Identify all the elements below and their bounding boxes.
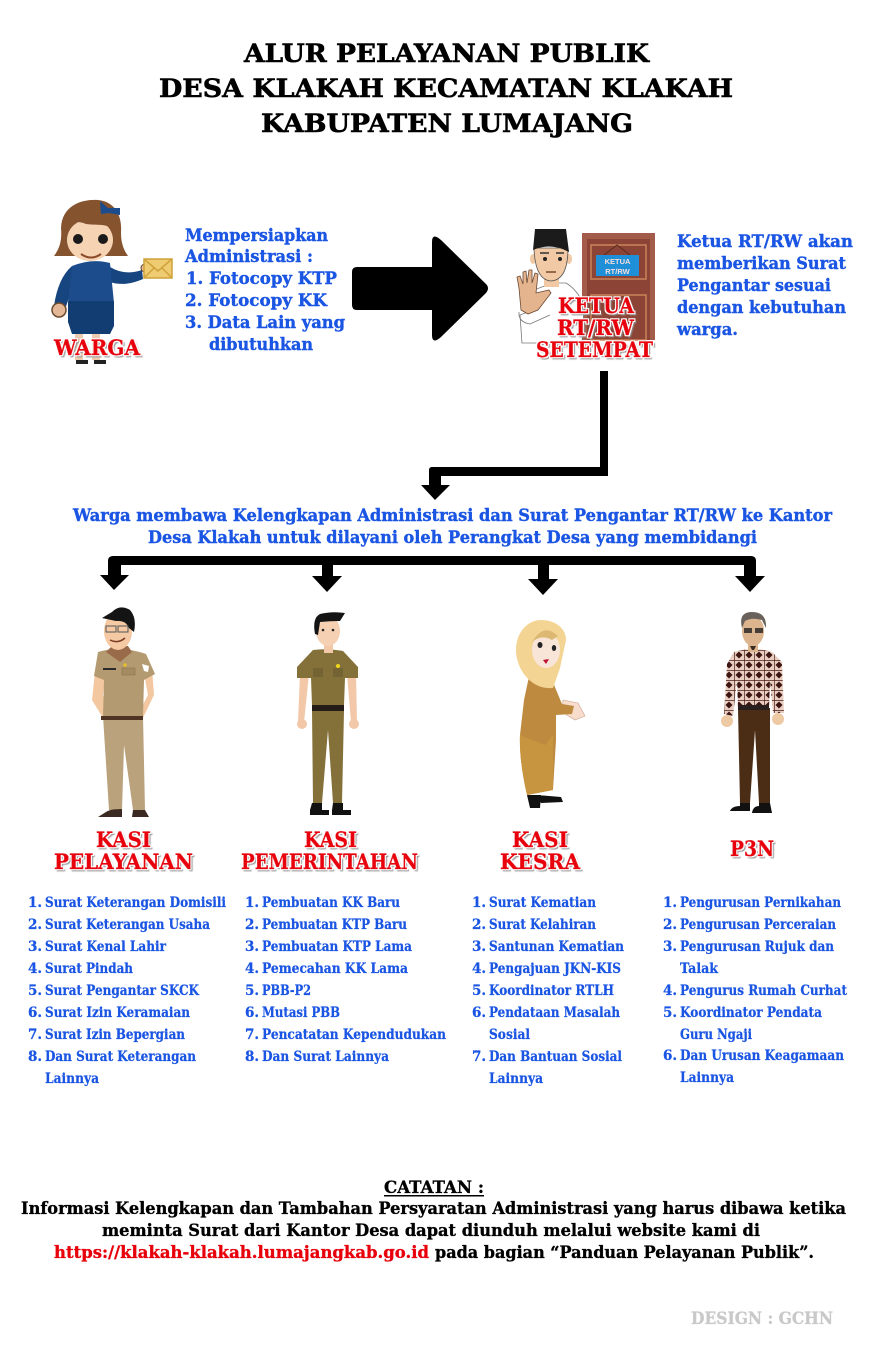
list: layanan kasi pelayanan: Surat Izin Keramaian — [45, 1005, 190, 1021]
list: layanan kasi pemerintahan: 2. — [245, 917, 259, 933]
note: catatan: CATATAN : — [384, 1178, 484, 1198]
text: persiapan administrasi: dibutuhkan — [209, 335, 313, 355]
list: layanan p3n: 5. — [663, 1005, 677, 1021]
list: layanan kasi kesra: Surat Kelahiran — [489, 917, 596, 933]
list: layanan kasi pemerintahan: Pembuatan KK Baru — [262, 895, 400, 911]
text: instruksi warga: Desa Klakah untuk dilayani oleh Perangkat Desa yang membidangi — [148, 528, 758, 548]
text: ketua description — [676, 232, 853, 340]
icon: man in batik shirt — [721, 612, 784, 813]
list: layanan kasi pelayanan: Surat Keterangan Domisili — [45, 895, 226, 911]
panel: p3n — [663, 612, 848, 1086]
list: layanan kasi pemerintahan: 7. — [245, 1027, 259, 1043]
label: ketua rt/rw setempat: RT/RW — [557, 315, 634, 340]
panel: kasi kesra — [472, 620, 624, 1087]
list: layanan kasi kesra — [472, 895, 624, 1087]
note: catatan: https://klakah-klakah.lumajangkab.go.id — [54, 1243, 429, 1263]
label: kasi pemerintahan: KASI — [304, 827, 357, 852]
label: p3n: P3N — [730, 836, 774, 861]
list: layanan kasi pemerintahan: 6. — [245, 1005, 259, 1021]
label: kasi pelayanan: KASI — [96, 827, 151, 852]
list: layanan kasi pemerintahan: Mutasi PBB — [262, 1005, 340, 1021]
label: kasi kesra: KESRA — [500, 849, 581, 874]
list: layanan kasi pemerintahan: 8. — [245, 1049, 259, 1065]
list: layanan kasi pemerintahan: Pencatatan Kependudukan — [262, 1027, 446, 1043]
list: layanan kasi pelayanan — [28, 895, 226, 1087]
arrow: elbow down — [421, 371, 608, 500]
title: KABUPATEN LUMAJANG — [261, 109, 633, 138]
list: layanan kasi pelayanan: 4. — [28, 961, 42, 977]
list: layanan p3n: Guru Ngaji — [680, 1027, 752, 1043]
panel: kasi pemerintahan — [241, 612, 446, 1065]
list: layanan kasi pelayanan: Surat Pindah — [45, 961, 133, 977]
list: layanan p3n: Lainnya — [680, 1070, 734, 1086]
note: catatan: Informasi Kelengkapan dan Tambahan Persyaratan Administrasi yang harus dibawa ketika — [21, 1199, 846, 1219]
list: layanan p3n: 4. — [663, 983, 677, 999]
list: layanan kasi kesra: Pengajuan JKN-KIS — [489, 961, 621, 977]
list: layanan kasi pelayanan: Surat Izin Bepergian — [45, 1027, 185, 1043]
label: kasi kesra — [500, 827, 581, 874]
list: layanan kasi pelayanan: 8. — [28, 1049, 42, 1065]
icon: woman with envelope — [52, 200, 172, 364]
label: kasi kesra: KASI — [512, 827, 568, 852]
list: layanan kasi pemerintahan: 4. — [245, 961, 259, 977]
text: instruksi warga: Warga membawa Kelengkapan Administrasi dan Surat Pengantar RT/RW ke Kantor — [72, 506, 833, 526]
list: layanan kasi pelayanan: Surat Pengantar SKCK — [45, 983, 200, 999]
icon: door with sign — [582, 233, 655, 340]
panel: warga — [52, 200, 345, 364]
label: kasi pemerintahan: PEMERINTAHAN — [241, 849, 418, 874]
panel: ketua rt/rw — [517, 229, 853, 362]
text: ketua description: Pengantar sesuai — [677, 276, 831, 296]
list: layanan kasi pelayanan: Dan Surat Keterangan — [45, 1049, 196, 1065]
icon: man with raised hand — [517, 229, 584, 343]
icon: door with sign: RT/RW — [605, 267, 631, 276]
list: layanan p3n: Pengurus Rumah Curhat — [680, 983, 848, 999]
text: persiapan administrasi: 3. Data Lain yang — [185, 313, 345, 333]
list: layanan p3n: 6. — [663, 1048, 677, 1064]
list: layanan kasi kesra: 3. — [472, 939, 486, 955]
text: persiapan administrasi: Administrasi : — [184, 247, 313, 267]
list: layanan p3n — [663, 895, 848, 1086]
list: layanan kasi kesra: 1. — [472, 895, 486, 911]
list: layanan kasi kesra: 4. — [472, 961, 486, 977]
list: layanan kasi kesra: Pendataan Masalah — [489, 1005, 620, 1021]
list: layanan kasi kesra: 7. — [472, 1049, 486, 1065]
list: layanan kasi pelayanan: 6. — [28, 1005, 42, 1021]
icon: officer in uniform — [297, 612, 359, 815]
list: layanan kasi kesra: Surat Kematian — [489, 895, 596, 911]
list: layanan kasi pemerintahan: 3. — [245, 939, 259, 955]
list: layanan kasi pelayanan: Surat Keterangan Usaha — [45, 917, 210, 933]
list: layanan p3n: Dan Urusan Keagamaan — [680, 1048, 844, 1064]
icon: door with sign: KETUA — [605, 257, 631, 266]
note: catatan: meminta Surat dari Kantor Desa dapat diunduh melalui website kami di — [102, 1221, 761, 1241]
title: ALUR PELAYANAN PUBLIK — [243, 39, 650, 68]
list: layanan kasi kesra: Lainnya — [489, 1071, 543, 1087]
list: layanan p3n: 1. — [663, 895, 677, 911]
text: ketua description: warga. — [676, 320, 738, 340]
list: layanan kasi pelayanan: 3. — [28, 939, 42, 955]
list: layanan p3n: Pengurusan Perceraian — [680, 917, 836, 933]
text: persiapan administrasi: 1. Fotocopy KTP — [186, 269, 337, 289]
arrows: branch to four officers — [100, 556, 765, 595]
text: persiapan administrasi — [184, 226, 345, 355]
label: ketua rt/rw setempat — [536, 293, 653, 362]
list: layanan kasi pemerintahan: 5. — [245, 983, 259, 999]
label: ketua rt/rw setempat: KETUA — [558, 293, 635, 318]
icon: officer with glasses — [92, 607, 155, 817]
text: ketua description: memberikan Surat — [677, 254, 846, 274]
list: layanan p3n: Koordinator Pendata — [680, 1005, 822, 1021]
list: layanan kasi pemerintahan — [245, 895, 446, 1065]
list: layanan kasi kesra: Sosial — [489, 1027, 530, 1043]
text: ketua description: Ketua RT/RW akan — [677, 232, 853, 252]
list: layanan p3n: Pengurusan Rujuk dan — [680, 939, 834, 955]
panel: kasi pelayanan — [28, 607, 226, 1087]
list: layanan kasi kesra: 6. — [472, 1005, 486, 1021]
list: layanan kasi pelayanan: 1. — [28, 895, 42, 911]
list: layanan kasi pemerintahan: PBB-P2 — [262, 983, 311, 999]
text: instruksi warga — [72, 506, 833, 548]
list: layanan kasi pemerintahan: Pemecahan KK Lama — [262, 961, 408, 977]
credit: design: DESIGN : GCHN — [691, 1309, 833, 1329]
list: layanan p3n: 3. — [663, 939, 677, 955]
list: layanan kasi pelayanan: 7. — [28, 1027, 42, 1043]
text: ketua description: dengan kebutuhan — [677, 298, 846, 318]
label: kasi pelayanan — [54, 827, 193, 874]
list: layanan kasi pemerintahan: Dan Surat Lainnya — [262, 1049, 389, 1065]
list: layanan kasi kesra: Koordinator RTLH — [489, 983, 614, 999]
title — [159, 39, 733, 138]
icon: woman in hijab — [516, 620, 585, 808]
list: layanan kasi kesra: 5. — [472, 983, 486, 999]
list: layanan kasi kesra: Dan Bantuan Sosial — [489, 1049, 622, 1065]
list: layanan kasi pelayanan: 2. — [28, 917, 42, 933]
label: warga: WARGA — [53, 335, 141, 360]
title: DESA KLAKAH KECAMATAN KLAKAH — [159, 74, 733, 103]
list: layanan kasi kesra: 2. — [472, 917, 486, 933]
text: persiapan administrasi: 2. Fotocopy KK — [185, 291, 328, 311]
list: layanan p3n: Talak — [680, 961, 719, 977]
list: layanan kasi pemerintahan: 1. — [245, 895, 259, 911]
note: catatan — [21, 1178, 846, 1263]
list: layanan kasi pelayanan: 5. — [28, 983, 42, 999]
list: layanan kasi pelayanan: Lainnya — [45, 1071, 99, 1087]
label: ketua rt/rw setempat: SETEMPAT — [536, 337, 653, 362]
list: layanan kasi kesra: Santunan Kematian — [489, 939, 624, 955]
text: persiapan administrasi: Mempersiapkan — [185, 226, 328, 246]
list: layanan p3n: 2. — [663, 917, 677, 933]
arrow: big right — [352, 236, 488, 341]
list: layanan kasi pelayanan: Surat Kenal Lahir — [45, 939, 167, 955]
note: catatan: pada bagian “Panduan Pelayanan Publik”. — [435, 1243, 814, 1263]
label: kasi pelayanan: PELAYANAN — [54, 849, 193, 874]
list: layanan p3n: Pengurusan Pernikahan — [680, 895, 841, 911]
label: kasi pemerintahan — [241, 827, 418, 874]
list: layanan kasi pemerintahan: Pembuatan KTP Lama — [262, 939, 412, 955]
list: layanan kasi pemerintahan: Pembuatan KTP Baru — [262, 917, 407, 933]
